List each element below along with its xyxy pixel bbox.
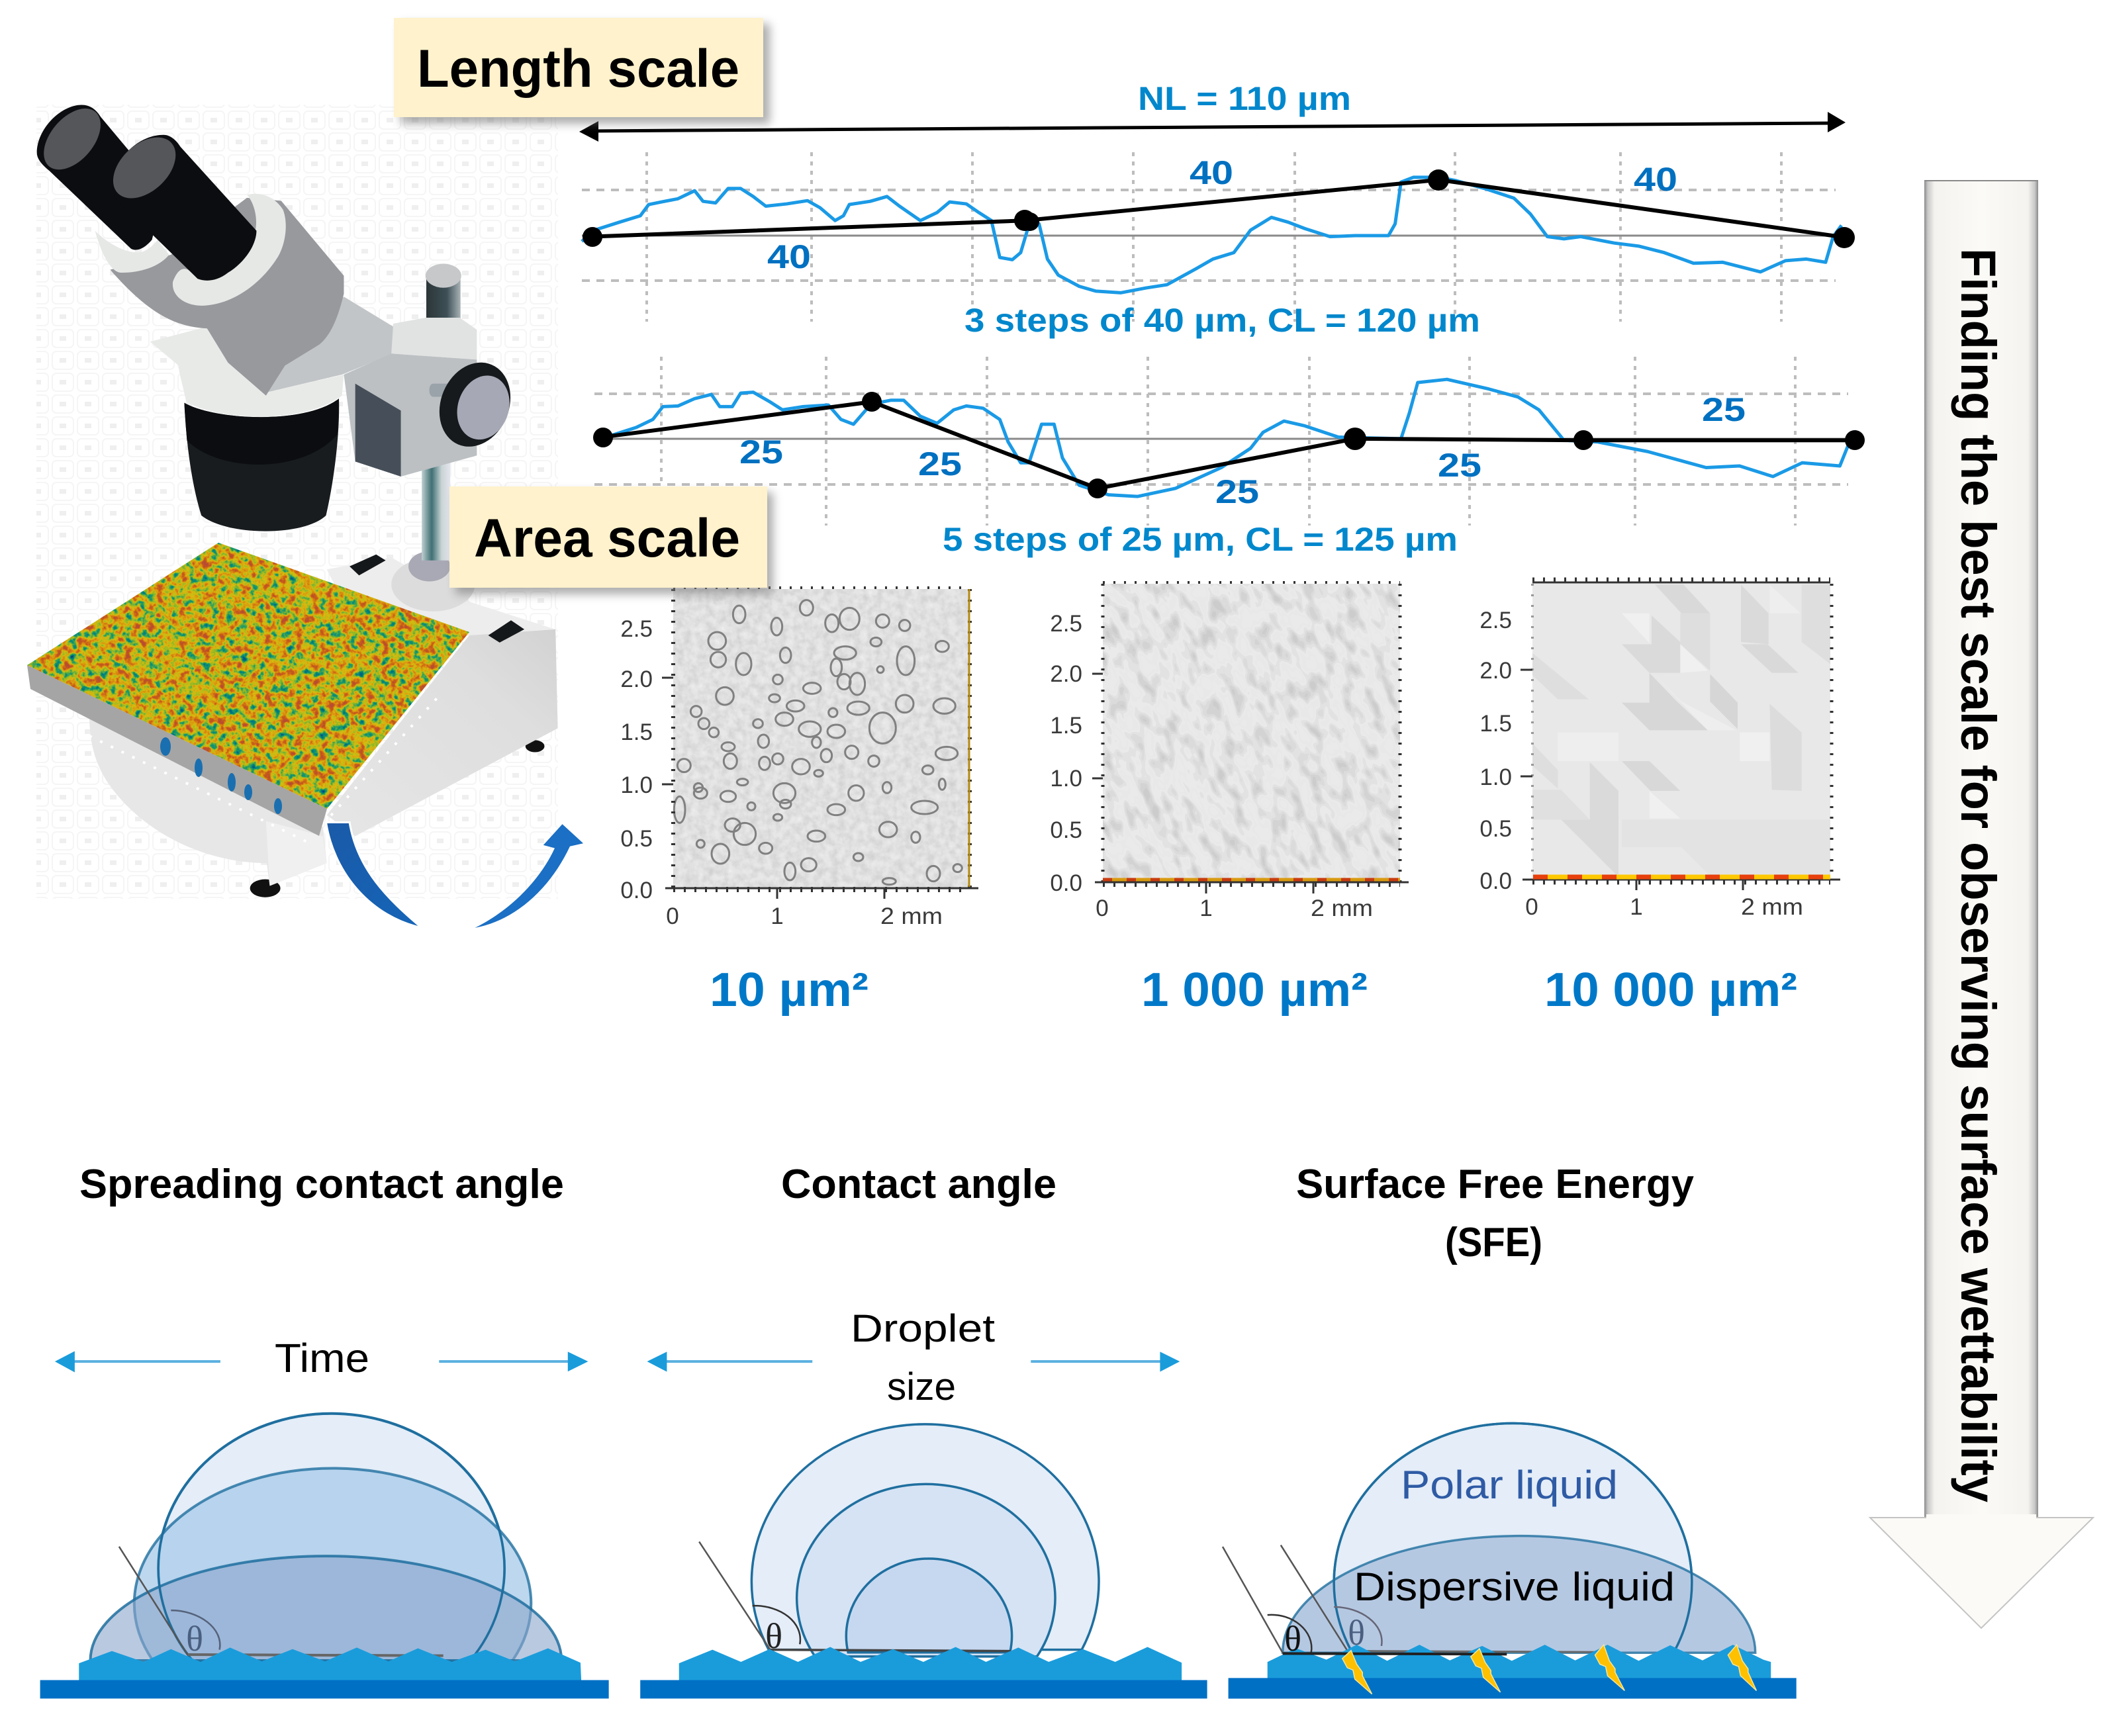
axis labels: 1 000 um2: 0.5: [1050, 817, 1082, 843]
step labels: 25: 25: [1702, 391, 1746, 428]
axis labels: 10 um2: 2.5: [620, 616, 653, 642]
theta: polar: θ: [1348, 1613, 1365, 1653]
axis labels: 10 000 um2: [1479, 608, 1803, 920]
sample edge ticks: [89, 698, 437, 844]
height map: 10 um2: [662, 588, 978, 899]
label: droplet size: size: [887, 1365, 956, 1408]
axis labels: 10 um2: 0.0: [620, 878, 653, 903]
axis labels: 10 000 um2: 2.5: [1479, 608, 1512, 633]
drawing: time arrows, drops and substrate: [40, 1351, 609, 1698]
heading: spreading contact angle: Spreading contact angle: [79, 1162, 564, 1207]
axis labels: 1 000 um2: 2.5: [1050, 611, 1082, 637]
NL label: NL = 110 µm: [1138, 80, 1351, 117]
arrow: finding the best scale: [1870, 180, 2093, 1628]
3D surface sample side: [27, 665, 327, 836]
heading: surface free energy: [1296, 1162, 1695, 1265]
panel: length scale profiles: [579, 80, 1865, 558]
axis labels: 1 000 um2: 1.0: [1050, 766, 1082, 792]
axis labels: 1 000 um2: 1.5: [1050, 713, 1082, 739]
step labels: 25: 25: [1215, 473, 1259, 510]
axis labels: 10 000 um2: 0.0: [1479, 868, 1512, 894]
caption: 5 steps: 5 steps of 25 µm, CL = 125 µm: [943, 521, 1458, 558]
axis labels: 10 um2: 1.0: [620, 772, 653, 798]
label: 10 um2: 10 µm²: [710, 964, 868, 1017]
axis labels: 10 um2: 0: [666, 903, 679, 929]
sample edge blue spikes: [160, 737, 282, 814]
axis labels: 1 000 um2: 2 mm: [1311, 895, 1373, 921]
label: 10 000 um2: 10 000 µm²: [1544, 964, 1797, 1017]
label: polar liquid: Polar liquid: [1401, 1463, 1618, 1507]
profile chart: 3 steps: [582, 152, 1855, 322]
panel: area scale height maps: [620, 391, 1840, 1077]
label box: area scale: [449, 486, 773, 594]
height map: 10 000 um2: [1521, 580, 1840, 890]
profile chart: 5 steps: [593, 357, 1865, 525]
panel: spreading contact angle diagram: [40, 1336, 609, 1698]
theta: θ: [186, 1619, 203, 1659]
theta: θ: [765, 1616, 782, 1656]
step labels: 25: 25: [739, 434, 783, 471]
axis labels: 10 000 um2: 1.5: [1479, 711, 1512, 737]
axis labels: 1 000 um2: 1: [1199, 895, 1213, 921]
3D surface colour map: [20, 536, 477, 814]
NL arrow: [579, 112, 1846, 142]
step labels: 25: 25: [1438, 447, 1481, 484]
axis labels: 10 um2: 1.5: [620, 719, 653, 745]
caption: 3 steps: 3 steps of 40 µm, CL = 120 µm: [964, 302, 1480, 339]
axis labels: 1 000 um2: 0.0: [1050, 870, 1082, 896]
step labels: 25: 25: [918, 445, 962, 482]
axis labels: 10 um2: 1: [771, 903, 784, 929]
label box: area scale: Area scale: [474, 508, 740, 569]
axis labels: 1 000 um2: [1050, 611, 1373, 921]
label box: length scale: [394, 18, 770, 124]
axis labels: 10 000 um2: 1: [1630, 894, 1643, 920]
heading: surface free energy: Surface Free Energy: [1296, 1162, 1695, 1207]
axis labels: 10 000 um2: 2 mm: [1741, 894, 1803, 920]
microscope background pattern: [36, 105, 558, 899]
step labels: 40: 40: [767, 238, 811, 275]
icon: microscope: [37, 96, 558, 897]
step labels: 40: 40: [1634, 161, 1677, 198]
label: droplet size: Droplet: [851, 1307, 995, 1350]
arrow: curved blue rotation: [326, 822, 583, 928]
axis labels: 1 000 um2: 2.0: [1050, 661, 1082, 687]
drawing: size arrows, drops and substrate: [640, 1351, 1207, 1698]
drawing: drops, substrate and bolts: [1223, 1423, 1797, 1699]
step labels: 40: [767, 154, 1677, 275]
axis labels: 10 000 um2: 1.0: [1479, 764, 1512, 790]
step labels: 40: 40: [1190, 154, 1233, 191]
axis labels: 10 um2: [620, 616, 943, 929]
axis labels: 10 um2: 2.0: [620, 666, 653, 692]
axis labels: 1 000 um2: 0: [1096, 895, 1109, 921]
step labels: 25: [739, 391, 1746, 510]
theta: dispersive: θ: [1284, 1619, 1301, 1659]
panel: surface free energy diagram: [1223, 1423, 1797, 1699]
axis labels: 10 000 um2: 0.5: [1479, 816, 1512, 842]
panel: contact angle diagram: [640, 1307, 1207, 1698]
arrow: finding the best scale: Finding the best scale for observing surface wettability: [1951, 248, 2006, 1502]
axis labels: 10 000 um2: 2.0: [1479, 658, 1512, 684]
axis labels: 10 um2: 0.5: [620, 826, 653, 852]
label box: length scale: Length scale: [417, 39, 739, 99]
height map: 1 000 um2: [1092, 581, 1409, 893]
label: dispersive liquid: Dispersive liquid: [1354, 1565, 1675, 1609]
panel: microscope illustration: [20, 96, 583, 928]
label: droplet size: [851, 1307, 995, 1408]
heading: surface free energy: (SFE): [1445, 1220, 1542, 1265]
axis labels: 10 000 um2: 0: [1525, 894, 1538, 920]
heading: contact angle: Contact angle: [781, 1162, 1056, 1207]
axis labels: 10 um2: 2 mm: [880, 903, 943, 929]
label: 1 000 um2: 1 000 µm²: [1141, 964, 1368, 1017]
label: time: Time: [275, 1336, 369, 1381]
